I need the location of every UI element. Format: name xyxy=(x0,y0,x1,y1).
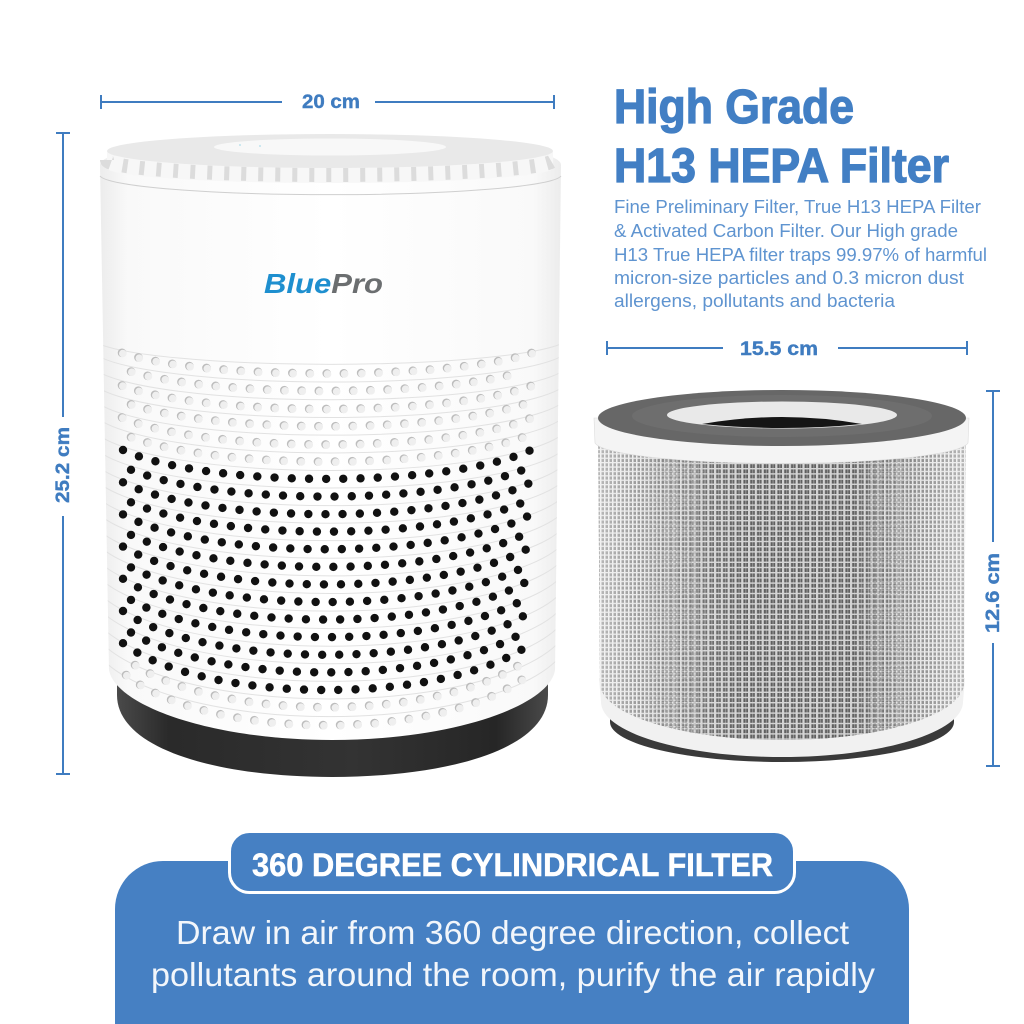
heading: High Grade H13 HEPA Filter: H13 HEPA Filter xyxy=(614,140,949,193)
black perforation rows xyxy=(123,450,531,690)
heading: High Grade H13 HEPA Filter: High Grade xyxy=(614,81,854,134)
description paragraph: H13 True HEPA filter traps 99.97% of harmful xyxy=(614,245,987,265)
louvre ring lines xyxy=(95,342,565,717)
dimension: filter height 12.6 cm xyxy=(983,391,1004,766)
dimension: filter width 15.5 cm: 15.5 cm xyxy=(740,339,818,360)
panel description: Draw in air from 360 degree direction, collect xyxy=(176,914,849,951)
black base xyxy=(117,660,548,777)
dimension: filter width 15.5 cm xyxy=(607,339,967,360)
dimension: unit width 20 cm xyxy=(101,92,554,113)
heading: High Grade H13 HEPA Filter xyxy=(614,81,949,193)
foam inner ring xyxy=(632,395,932,437)
pill heading xyxy=(230,832,794,892)
bottom felt layer xyxy=(610,716,954,762)
white cylinder body xyxy=(100,139,561,740)
description paragraph: micron-size particles and 0.3 micron dust xyxy=(614,268,964,288)
description paragraph: & Activated Carbon Filter. Our High grade xyxy=(614,221,958,241)
lid top surface xyxy=(107,134,553,168)
description paragraph xyxy=(614,197,987,311)
air purifier unit xyxy=(95,134,565,777)
logo: BluePro: Blue Pro xyxy=(264,268,383,299)
control panel oval xyxy=(214,138,446,156)
description paragraph: Fine Preliminary Filter, True H13 HEPA Filter xyxy=(614,197,981,217)
foam top seal xyxy=(598,390,966,446)
panel description xyxy=(151,914,876,993)
dimension: unit height 25.2 cm xyxy=(53,133,74,774)
panel description: pollutants around the room, purify the air rapidly xyxy=(151,956,876,993)
dimension: filter height 12.6 cm: 12.6 cm xyxy=(983,553,1004,633)
ribbed lid edge xyxy=(107,152,553,183)
recessed dimple rows xyxy=(122,353,533,726)
rim seam line xyxy=(100,176,561,195)
dimension: unit height 25.2 cm: 25.2 cm xyxy=(53,427,74,503)
centre opening xyxy=(667,402,897,428)
blue panel background xyxy=(115,861,909,1024)
top white rim xyxy=(594,418,969,463)
pleated mesh wall xyxy=(595,425,970,745)
description paragraph: allergens, pollutants and bacteria xyxy=(614,291,896,311)
pill heading: 360 DEGREE CYLINDRICAL FILTER xyxy=(252,847,773,883)
bottom panel xyxy=(115,832,909,1024)
bottom white rim xyxy=(599,678,965,757)
dimension: unit width 20 cm: 20 cm xyxy=(302,92,360,113)
HEPA filter cartridge xyxy=(594,390,970,762)
